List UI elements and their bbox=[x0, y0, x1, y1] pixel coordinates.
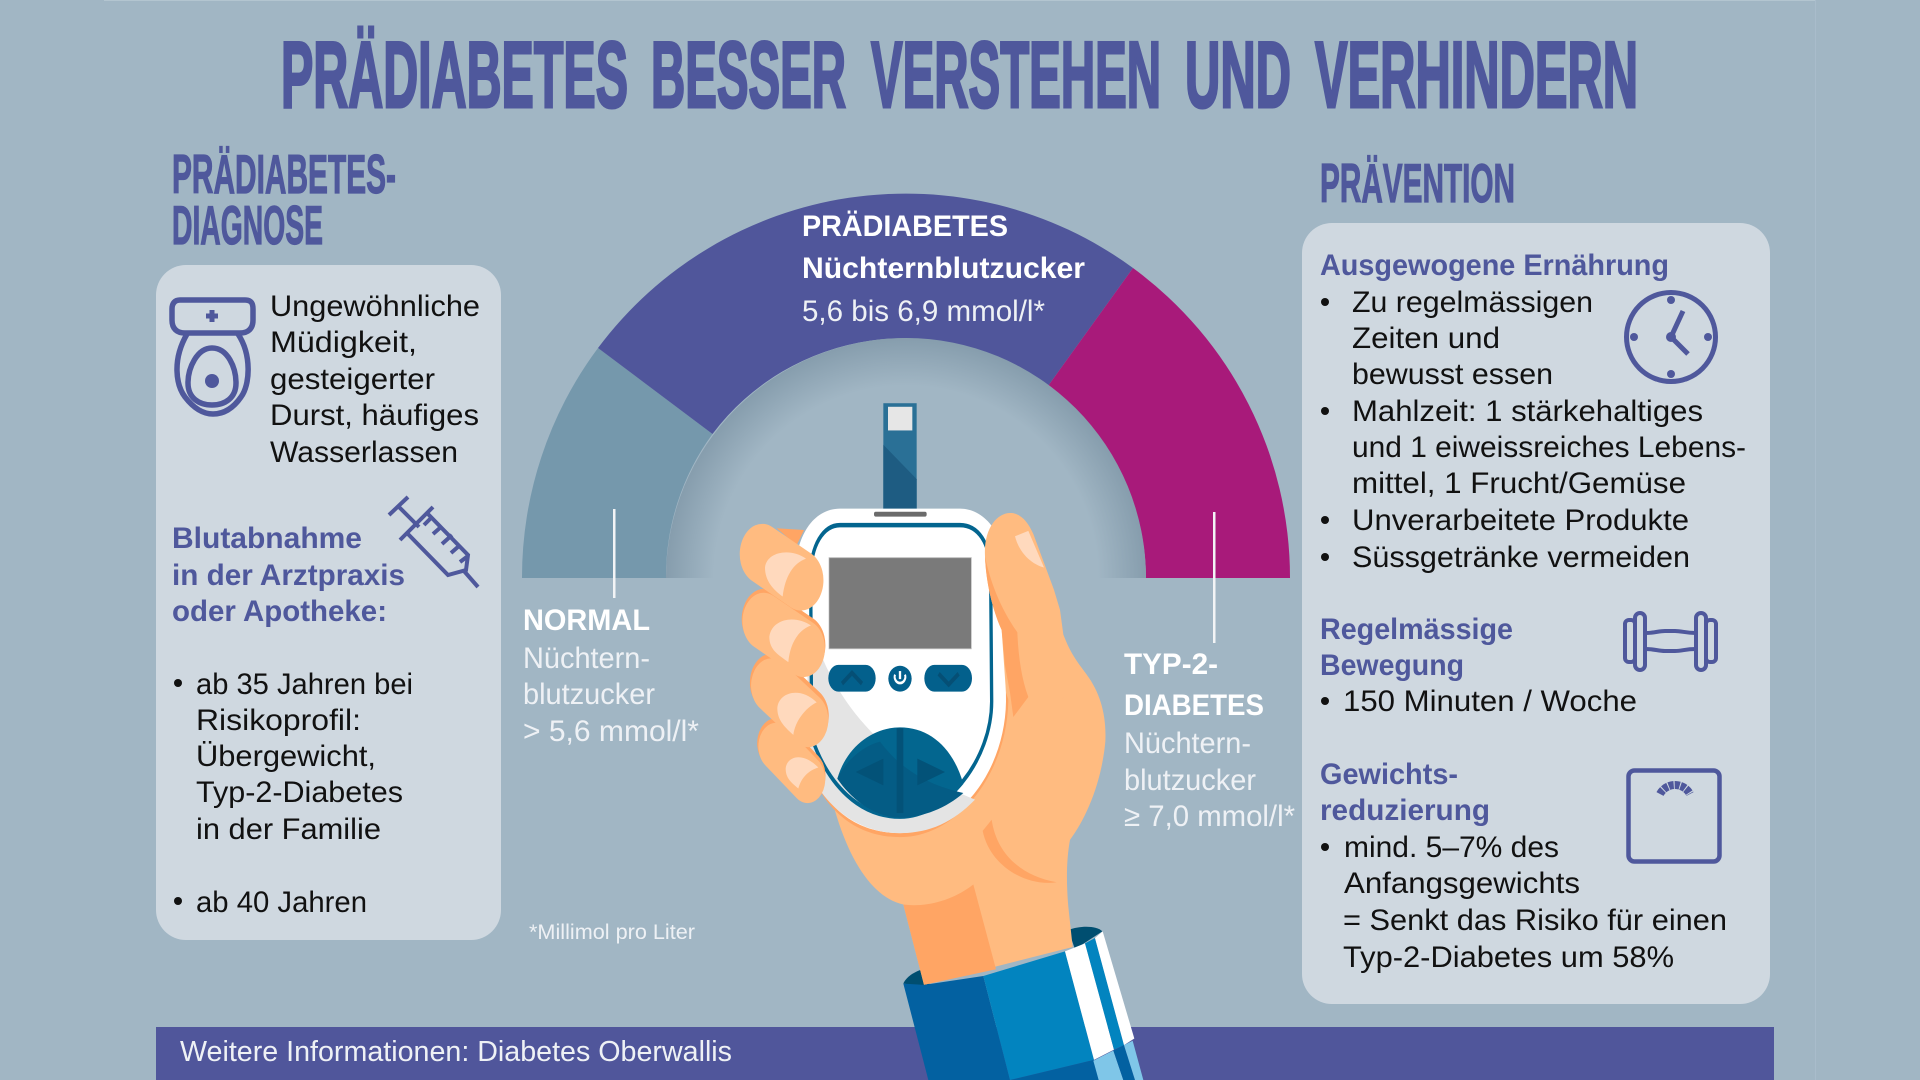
panel: diagnosis bbox=[156, 265, 501, 940]
text: symptoms bbox=[270, 290, 480, 469]
finger 1 bbox=[732, 513, 831, 621]
text: normal label: blutzucker bbox=[523, 678, 655, 711]
leader line: normal bbox=[613, 509, 616, 598]
illustration: hand holding glucose meter bbox=[732, 403, 1143, 1080]
meter shadow bbox=[800, 512, 1008, 837]
text: balanced diet: Ausgewogene Ernährung bbox=[1320, 249, 1669, 282]
wrist shadow bbox=[903, 884, 996, 985]
icon: clock bbox=[1626, 292, 1716, 382]
text: type 2 diabetes label: Nüchtern- bbox=[1124, 727, 1251, 760]
text: regular exercise: 150 Minuten / Woche bbox=[1343, 685, 1637, 718]
text: type 2 diabetes label: DIABETES bbox=[1124, 689, 1264, 722]
text: weight reduction: Gewichts- bbox=[1320, 758, 1458, 791]
text: regular exercise bbox=[1320, 613, 1637, 718]
icon: dumbbell bbox=[1625, 613, 1716, 670]
finger 2 bbox=[734, 578, 833, 687]
text: balanced diet: Zeiten und bbox=[1352, 322, 1500, 355]
text: symptoms: Müdigkeit, bbox=[270, 326, 417, 359]
heading: Prädiabetes-Diagnose bbox=[172, 143, 396, 256]
text: blood test heading: Blutabnahme bbox=[172, 522, 362, 555]
meter highlight bbox=[807, 648, 975, 833]
gauge: blood sugar ranges bbox=[522, 194, 1290, 578]
leader line: type 2 diabetes bbox=[1213, 512, 1216, 643]
title: PRÄDIABETES bbox=[281, 22, 628, 127]
text: balanced diet: und 1 eiweissreiches Lebens- bbox=[1352, 431, 1746, 464]
list: risk groups: Risikoprofil: bbox=[196, 704, 361, 737]
text: regular exercise: Regelmässige bbox=[1320, 613, 1513, 646]
list: risk groups: ab 35 Jahren bei bbox=[196, 668, 413, 701]
text: balanced diet: Zu regelmässigen bbox=[1352, 286, 1593, 319]
text: blood test heading: oder Apotheke: bbox=[172, 595, 387, 628]
text: balanced diet: bewusst essen bbox=[1352, 358, 1553, 391]
text: balanced diet: Unverarbeitete Produkte bbox=[1352, 504, 1689, 537]
footer bar bbox=[156, 1027, 1774, 1080]
sleeve inner opening bbox=[903, 927, 1102, 987]
text: normal label: NORMAL bbox=[523, 604, 650, 637]
text: blood test heading: in der Arztpraxis bbox=[172, 559, 405, 592]
text: weight reduction: = Senkt das Risiko für einen bbox=[1343, 904, 1727, 937]
text: type 2 diabetes label: blutzucker bbox=[1124, 764, 1256, 797]
text: regular exercise: Bewegung bbox=[1320, 649, 1464, 682]
text: type 2 diabetes label bbox=[1124, 648, 1295, 833]
icon: bathroom scale bbox=[1628, 770, 1720, 862]
icon: toilet bbox=[172, 300, 253, 414]
text: type 2 diabetes label: ≥ 7,0 mmol/l* bbox=[1124, 800, 1295, 833]
text: weight reduction: Typ-2-Diabetes um 58% bbox=[1343, 941, 1674, 974]
panel: prevention bbox=[1302, 223, 1770, 1004]
meter border bbox=[811, 525, 992, 817]
heading: Prädiabetes-Diagnose: PRÄDIABETES- bbox=[172, 143, 396, 205]
text: prediabetes label: 5,6 bis 6,9 mmol/l* bbox=[802, 295, 1045, 328]
text: normal label: Nüchtern- bbox=[523, 642, 650, 675]
text: prediabetes label bbox=[802, 210, 1085, 328]
list: risk groups: Übergewicht, bbox=[196, 740, 376, 773]
text: balanced diet: Mahlzeit: 1 stärkehaltiges bbox=[1352, 395, 1703, 428]
text: weight reduction: mind. 5–7% des bbox=[1344, 831, 1559, 864]
text: weight reduction bbox=[1320, 758, 1727, 974]
text: symptoms: Durst, häufiges bbox=[270, 399, 479, 432]
title: VERSTEHEN bbox=[871, 22, 1161, 127]
finger 3 bbox=[741, 642, 837, 758]
title: VERHINDERN bbox=[1315, 22, 1638, 127]
test strip bbox=[883, 403, 917, 514]
palm crease bbox=[983, 820, 1057, 883]
text: symptoms: gesteigerter bbox=[270, 363, 435, 396]
list: risk groups: in der Familie bbox=[196, 813, 381, 846]
palm and wrist bbox=[835, 603, 1105, 985]
text: symptoms: Wasserlassen bbox=[270, 436, 458, 469]
meter screen bbox=[829, 558, 971, 649]
footnote: *Millimol pro Liter bbox=[529, 921, 695, 944]
inner shaded dial bbox=[666, 338, 1146, 578]
strip slot bbox=[874, 512, 927, 517]
segment: normal bbox=[522, 348, 712, 578]
footer bar: Weitere Informationen: Diabetes Oberwallis bbox=[180, 1036, 732, 1068]
thumb bbox=[985, 513, 1087, 728]
text: normal label: > 5,6 mmol/l* bbox=[523, 715, 699, 748]
text: prediabetes label: Nüchternblutzucker bbox=[802, 252, 1085, 285]
heading: Prävention: PRÄVENTION bbox=[1320, 152, 1515, 214]
meter body bbox=[795, 509, 1006, 833]
heading: Prädiabetes-Diagnose: DIAGNOSE bbox=[172, 194, 323, 256]
text: balanced diet: Süssgetränke vermeiden bbox=[1352, 541, 1690, 574]
title: BESSER bbox=[651, 22, 846, 127]
meter dome pad bbox=[837, 727, 963, 818]
meter buttons bbox=[828, 665, 972, 692]
list: risk groups: Typ-2-Diabetes bbox=[196, 776, 403, 809]
list: risk groups: ab 40 Jahren bbox=[196, 886, 367, 919]
title bbox=[281, 22, 1638, 127]
text: prediabetes label: PRÄDIABETES bbox=[802, 210, 1008, 243]
text: weight reduction: Anfangsgewichts bbox=[1344, 867, 1580, 900]
text: balanced diet: mittel, 1 Frucht/Gemüse bbox=[1352, 467, 1686, 500]
icon: syringe bbox=[389, 497, 478, 587]
list: risk groups bbox=[174, 668, 413, 919]
text: symptoms: Ungewöhnliche bbox=[270, 290, 480, 323]
title: UND bbox=[1185, 22, 1291, 127]
text: weight reduction: reduzierung bbox=[1320, 794, 1490, 827]
segment: type 2 diabetes bbox=[1048, 268, 1290, 578]
segment: prediabetes bbox=[598, 194, 1133, 434]
text: normal label bbox=[523, 604, 699, 748]
finger 4 bbox=[750, 708, 833, 813]
shirt sleeve bbox=[903, 931, 1143, 1080]
text: blood test heading bbox=[172, 522, 405, 628]
text: type 2 diabetes label: TYP-2- bbox=[1124, 648, 1218, 681]
text: balanced diet bbox=[1320, 249, 1746, 574]
